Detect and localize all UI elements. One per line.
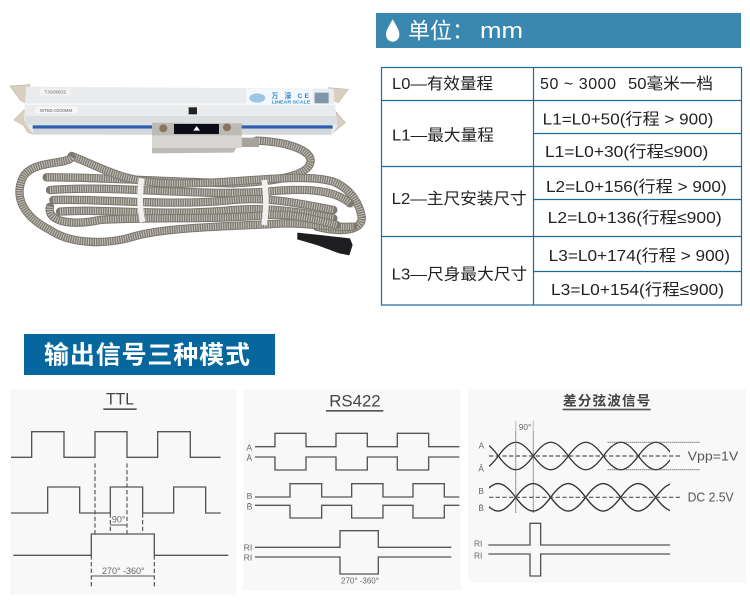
rail label: serial bbox=[40, 89, 71, 95]
row L2: L2=L0+156(行程 > 900) bbox=[546, 178, 727, 196]
sine labels: B bbox=[478, 486, 484, 496]
row L2 bbox=[392, 178, 727, 227]
rail logo badge: LINEAR SCALE bbox=[272, 99, 310, 104]
row L2: L2—主尺安装尺寸 bbox=[392, 190, 527, 208]
section heading: output signals bbox=[24, 334, 275, 375]
blue rail strip bbox=[33, 125, 333, 129]
RS422 channel labels: B̄ bbox=[247, 502, 253, 512]
dimension table bbox=[382, 68, 742, 305]
sine labels bbox=[474, 422, 531, 560]
row L1: L1=L0+30(行程≤900) bbox=[545, 143, 708, 161]
RS422 channel labels: RI bbox=[244, 542, 252, 552]
TTL waveforms bbox=[11, 432, 228, 587]
rail label: serial: TJG80632 bbox=[44, 90, 67, 95]
rail label: model: WTB5-0200MM bbox=[40, 108, 72, 113]
rail logo badge bbox=[246, 89, 313, 105]
row L3: L3—尺身最大尺寸 bbox=[392, 266, 527, 284]
DC label: DC 2.5V bbox=[688, 491, 734, 505]
RS422 waveforms bbox=[255, 433, 459, 574]
cable tie left bbox=[140, 178, 143, 222]
cable coil bbox=[20, 141, 362, 242]
row L3: L3=L0+174(行程 > 900) bbox=[549, 247, 730, 265]
row L1 bbox=[392, 110, 713, 161]
sine panel title: 差分弦波信号 bbox=[563, 392, 650, 408]
sine waveforms bbox=[463, 421, 700, 576]
RS422 channel labels: RI bbox=[244, 553, 252, 563]
sine labels: 90° bbox=[519, 422, 531, 432]
row L1: L1=L0+50(行程 > 900) bbox=[543, 110, 713, 128]
unit heading bbox=[408, 18, 523, 44]
RS422 channel labels bbox=[244, 442, 253, 563]
sine labels: Ā bbox=[478, 463, 484, 473]
cable tie right bbox=[264, 180, 266, 225]
RS422 channel labels: A bbox=[246, 442, 252, 452]
connector plug bbox=[297, 233, 353, 255]
rail marker bbox=[189, 107, 197, 114]
right bracket bbox=[328, 88, 348, 134]
panel: TTL bbox=[10, 389, 237, 595]
section heading: output signals: 输出信号三种模式 bbox=[44, 342, 250, 370]
sine labels: B̄ bbox=[478, 503, 484, 513]
scale rail body bbox=[24, 87, 337, 135]
unit heading: 单位： bbox=[408, 18, 474, 44]
TTL phase labels: 270° -360° bbox=[102, 566, 145, 576]
panel: differential sine bbox=[474, 394, 738, 577]
panel: RS422 bbox=[243, 389, 461, 591]
row L2: L2=L0+136(行程≤900) bbox=[548, 209, 722, 227]
unit heading: mm bbox=[480, 18, 523, 43]
TTL phase labels bbox=[102, 515, 145, 576]
slider head bbox=[152, 123, 259, 153]
row L0: L0—有效量程 bbox=[392, 75, 493, 93]
sine labels: RI bbox=[474, 550, 482, 560]
rail label: model bbox=[35, 107, 78, 113]
RS422 channel labels: Ā bbox=[246, 453, 252, 463]
row L0 bbox=[392, 74, 713, 93]
product photo: linear scale with cable bbox=[10, 85, 362, 255]
sine labels: A bbox=[479, 440, 485, 450]
unit header bar bbox=[376, 13, 741, 48]
left bracket bbox=[10, 85, 33, 134]
row L0: 50毫米一档 bbox=[628, 74, 713, 93]
rail QR code bbox=[315, 93, 329, 103]
row L0: 50 ~ 3000 bbox=[540, 76, 616, 93]
RS422 channel labels: B bbox=[247, 491, 253, 501]
sine labels: RI bbox=[474, 539, 482, 549]
RS422 phase label: 270° -360° bbox=[341, 576, 379, 585]
icon: water drop bbox=[386, 19, 399, 42]
row L1: L1—最大量程 bbox=[392, 126, 494, 144]
rail logo badge: 万 濠 CE bbox=[272, 91, 310, 100]
TTL phase labels: 90° bbox=[112, 515, 126, 525]
TTL title: TTL bbox=[106, 390, 134, 409]
row L3 bbox=[392, 247, 730, 299]
Vpp label: Vpp=1V bbox=[688, 448, 738, 463]
RS422 title: RS422 bbox=[329, 391, 381, 410]
row L3: L3=L0+154(行程≤900) bbox=[551, 281, 724, 299]
